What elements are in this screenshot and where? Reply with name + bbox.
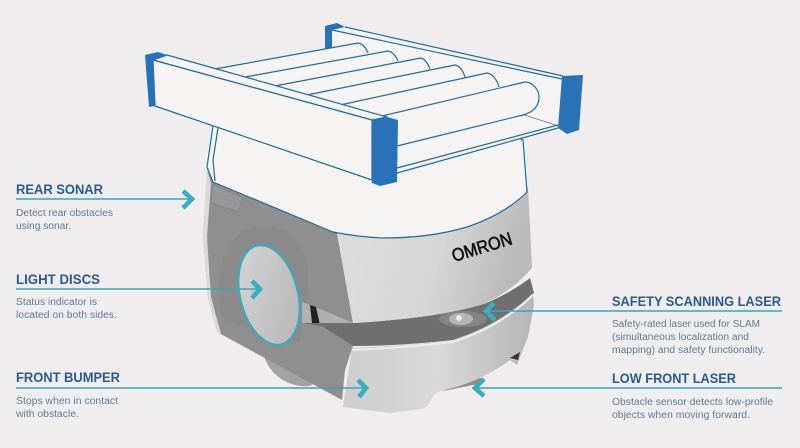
front bumper xyxy=(343,293,534,413)
callout: rear sonar: REAR SONAR xyxy=(16,182,103,197)
wheel xyxy=(264,345,326,386)
callout: front bumper: Stops when in contact xyxy=(16,396,118,407)
callout: light discs: located on both sides. xyxy=(16,310,117,321)
side edge highlight xyxy=(203,170,221,334)
callout: front bumper: FRONT BUMPER xyxy=(16,370,120,385)
cover left double edge xyxy=(213,128,218,181)
back rail cap xyxy=(325,23,345,49)
callout: rear sonar: using sonar. xyxy=(16,221,71,232)
callout: front bumper xyxy=(15,370,366,420)
conveyor lower tray xyxy=(397,115,558,173)
front upper housing xyxy=(337,187,532,323)
sonar panel xyxy=(211,184,243,212)
callout: low front laser xyxy=(475,371,782,421)
front rail cap xyxy=(372,117,398,186)
callout: safety scanning laser xyxy=(486,294,782,356)
callout: rear sonar xyxy=(16,182,192,232)
rollers xyxy=(215,43,539,146)
callout: safety scanning laser: mapping) and safety functionality. xyxy=(612,345,765,356)
white upper cover xyxy=(207,80,527,238)
wheel hub recess xyxy=(219,226,309,342)
callout: safety scanning laser: Safety-rated laser used for SLAM xyxy=(612,319,760,330)
callout: safety scanning laser: (simultaneous localization and xyxy=(612,332,749,343)
callout: low front laser: objects when moving forward. xyxy=(612,410,750,421)
conveyor front rail xyxy=(153,55,387,180)
robot side housing xyxy=(203,170,353,400)
callout: rear sonar: Detect rear obstacles xyxy=(16,208,113,219)
callout: low front laser: Obstacle sensor detects low-profile xyxy=(612,397,773,408)
logo: OMRON xyxy=(449,229,514,266)
safety scanning laser dome xyxy=(439,311,487,327)
low front laser xyxy=(443,378,482,391)
callout: light discs: LIGHT DISCS xyxy=(16,272,100,287)
left rail cap xyxy=(145,52,167,107)
side opening shadow xyxy=(310,305,320,325)
right rail cap xyxy=(558,75,583,134)
callout: low front laser: LOW FRONT LASER xyxy=(612,371,736,386)
dark gap band xyxy=(302,278,534,346)
callout: light discs: Status indicator is xyxy=(16,297,97,308)
callout: front bumper: with obstacle. xyxy=(15,409,79,420)
bumper notch xyxy=(510,352,520,360)
callout: light discs xyxy=(16,272,260,321)
light disc xyxy=(229,238,309,352)
bumper rim highlight xyxy=(352,295,533,350)
callout: safety scanning laser: SAFETY SCANNING LASER xyxy=(612,294,781,309)
side opening xyxy=(302,302,353,327)
robot illustration xyxy=(145,23,583,413)
conveyor back rail xyxy=(332,27,563,173)
